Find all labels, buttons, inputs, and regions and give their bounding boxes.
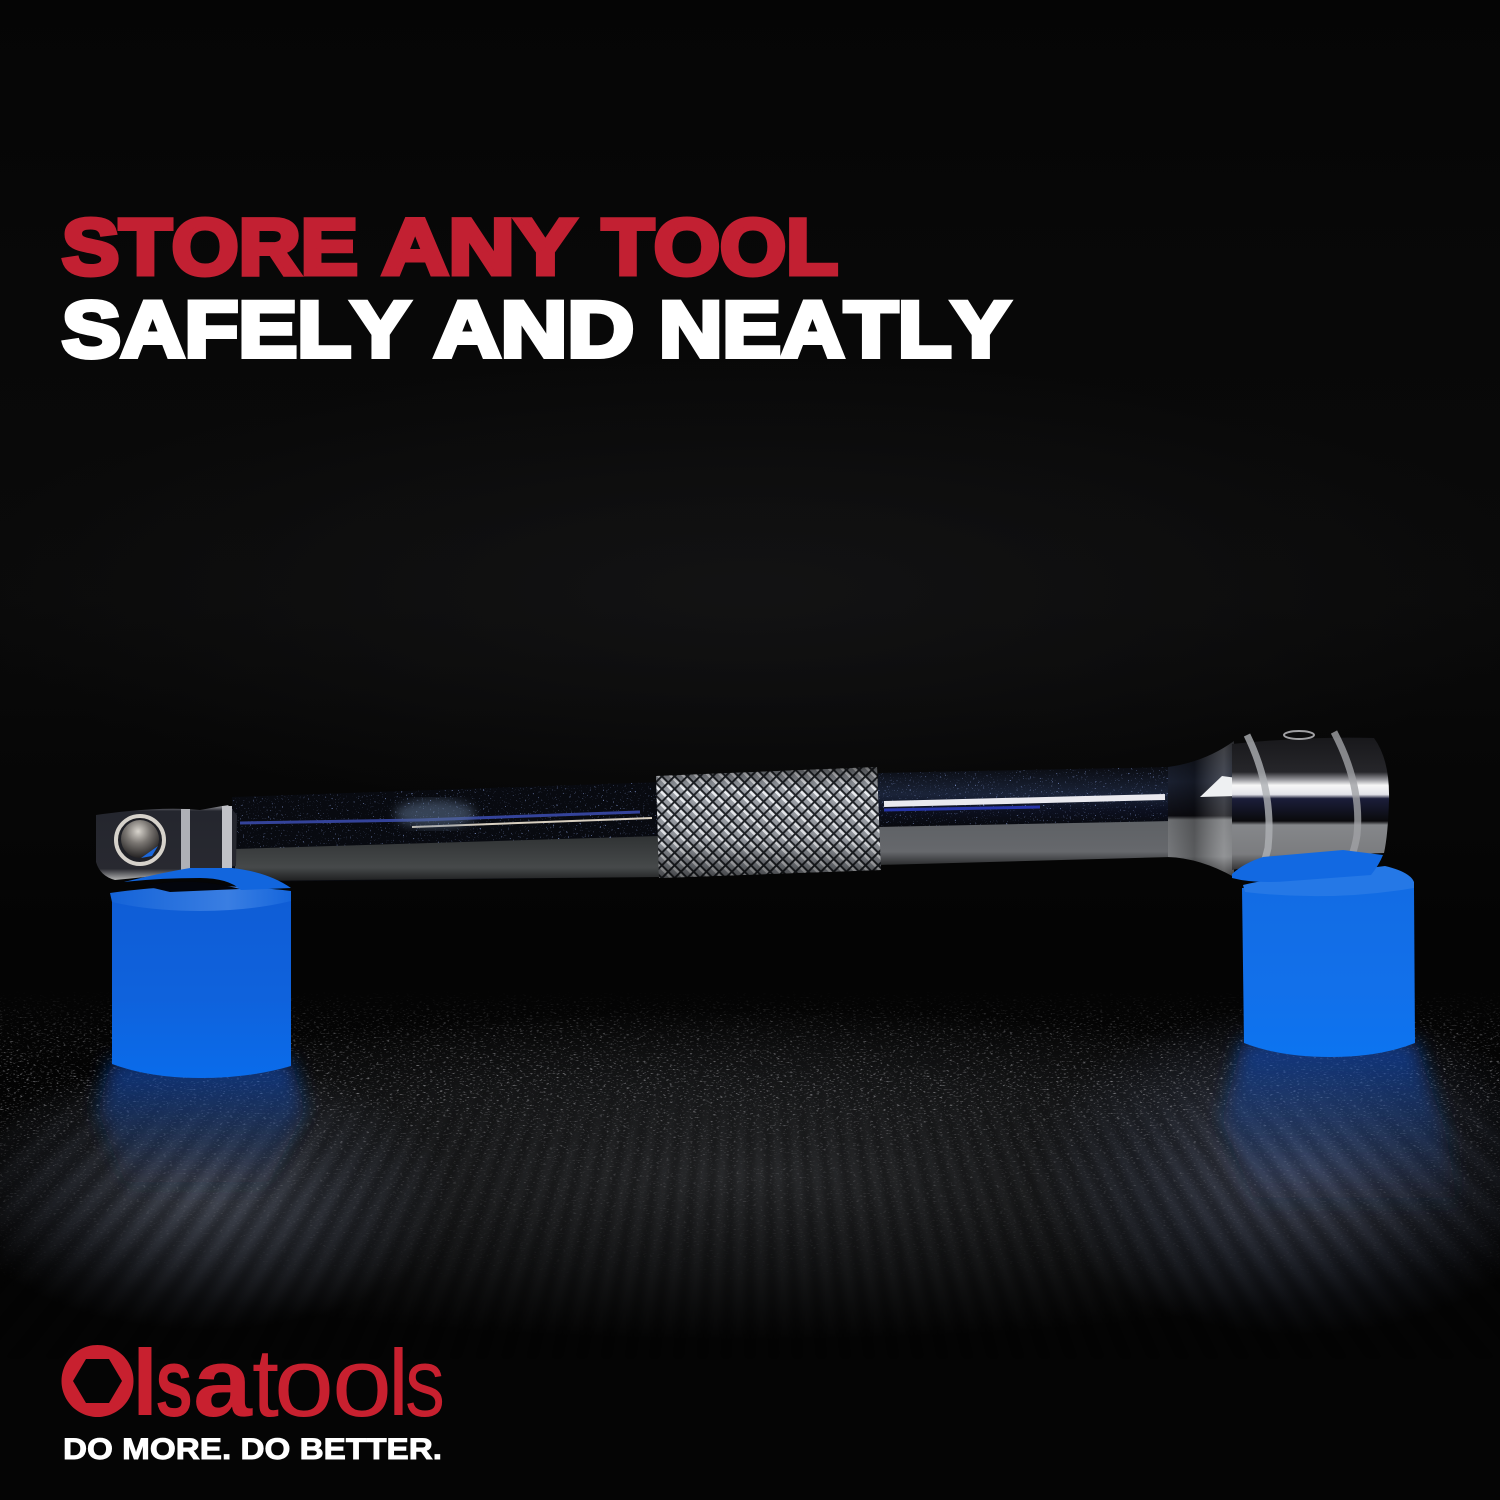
socket extension tool — [96, 731, 1389, 892]
shaft gray reflection right — [878, 821, 1172, 865]
headline line 1: TOOL — [602, 202, 838, 291]
blue flap under ball end — [124, 868, 291, 892]
hinge highlight — [181, 809, 190, 870]
wordmark letter l: l — [132, 1330, 158, 1435]
shaft dark upper right — [878, 767, 1172, 828]
headline line 2: SAFELY — [62, 284, 410, 374]
wordmark letter s: s — [155, 1328, 193, 1437]
peg lip — [1243, 866, 1414, 896]
shaft speckle right — [878, 767, 1172, 828]
shaft right section — [878, 767, 1172, 865]
ball bearing — [116, 816, 164, 864]
headline line 2: AND — [434, 284, 634, 374]
reflection: right blue peg — [1222, 1040, 1460, 1215]
headline line 1: STORE — [62, 202, 358, 291]
barrel ring right — [1334, 732, 1358, 872]
peg body — [1242, 888, 1415, 1057]
headline line 2 — [62, 284, 1010, 374]
blue peg: right — [1242, 866, 1415, 1057]
shaft speckle — [232, 782, 660, 850]
peg lip — [110, 886, 291, 911]
blue peg: left — [110, 886, 291, 1078]
floor speckle texture — [0, 990, 1500, 1290]
cream highlight — [412, 818, 652, 827]
headline line 1: ANY — [382, 202, 576, 291]
peg body — [112, 900, 291, 1078]
flap opening shadow — [145, 882, 240, 892]
headline line 1 — [62, 202, 838, 291]
reflection: left blue peg — [98, 1060, 305, 1195]
barrel ring left — [1247, 735, 1269, 880]
logo — [62, 1328, 445, 1466]
floor weave stripes — [0, 1101, 1500, 1298]
soft shaft glint — [395, 800, 475, 828]
shaft dark upper — [232, 782, 660, 882]
blue flap under socket head — [1232, 850, 1383, 882]
wordmark letter o: o — [274, 1328, 334, 1437]
wordmark letter t: t — [252, 1328, 279, 1437]
wordmark last letter s: s — [405, 1328, 445, 1437]
neck glint — [1200, 776, 1237, 797]
logo wordmark — [132, 1328, 445, 1437]
tagline: DO MORE. DO BETTER. — [63, 1433, 442, 1466]
detent hole — [1284, 731, 1314, 739]
shaft left section — [232, 782, 660, 882]
ball detent end — [96, 805, 237, 880]
end highlight — [222, 806, 232, 868]
wordmark second letter l: l — [388, 1330, 409, 1435]
flared neck — [1168, 741, 1237, 877]
shaft gray reflection — [235, 836, 660, 881]
headline line 2: NEATLY — [659, 284, 1010, 374]
flap — [124, 868, 291, 890]
logo mark: hexagon in circle — [62, 1345, 134, 1417]
blue highlight — [240, 812, 640, 823]
knurled grip — [656, 767, 881, 878]
wordmark second letter o: o — [332, 1328, 392, 1437]
square drive socket head — [1232, 731, 1389, 880]
wordmark letter a: a — [193, 1328, 253, 1437]
blue underline highlight — [884, 807, 1040, 810]
headline — [62, 202, 1010, 374]
white highlight — [884, 797, 1165, 804]
